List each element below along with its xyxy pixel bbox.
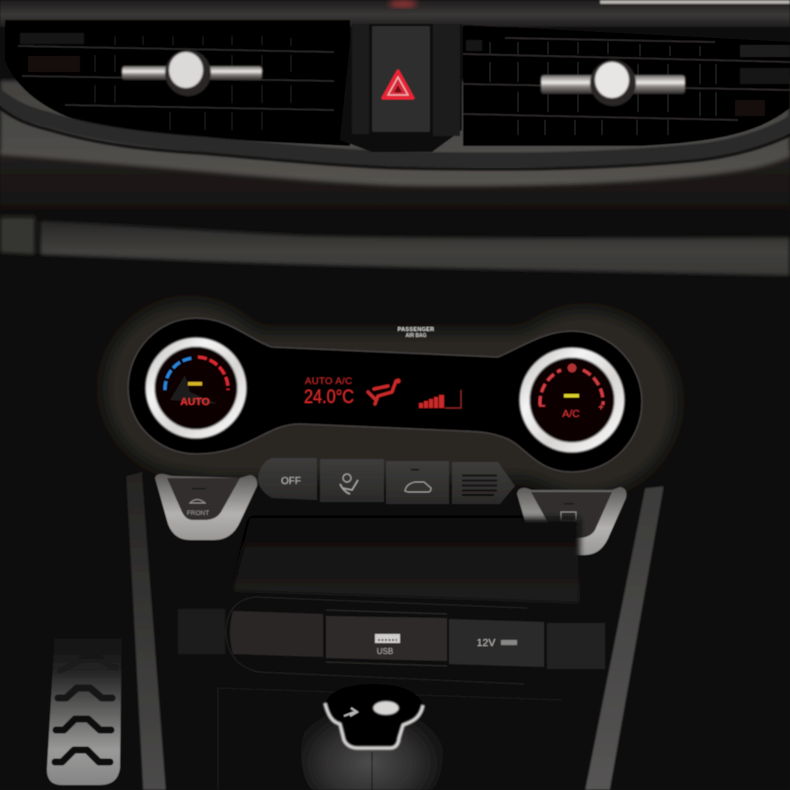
passenger air bag indicator: AIR BAG [405, 333, 427, 339]
button: recirculation airflow [320, 459, 384, 502]
console display bezel [128, 318, 642, 472]
12V socket panel: 12V [477, 637, 495, 649]
red climate display: AUTO A/C [305, 376, 352, 387]
icon: fan level bars [419, 390, 461, 408]
under-bezel dark surface [0, 150, 790, 225]
lower tray [218, 688, 562, 790]
blank side panel right [547, 623, 605, 669]
icon: red hazard triangle [383, 71, 413, 98]
vent bezel curve [0, 95, 790, 160]
storage tray [232, 518, 580, 604]
gear knob [301, 683, 443, 790]
12V socket panel [449, 619, 544, 667]
passenger air bag indicator [398, 327, 434, 339]
left vent chrome slider [122, 50, 262, 96]
footrest pedal [47, 612, 122, 785]
right climate dial: + [598, 402, 604, 412]
icon: airflow seat [368, 381, 396, 404]
grey lower dash band [0, 80, 790, 186]
front defrost button: FRONT [187, 510, 209, 517]
textured dash pad [0, 217, 790, 276]
right air vent [463, 25, 790, 146]
button: grille [452, 462, 515, 504]
climate button row [258, 458, 515, 504]
right climate dial [524, 352, 620, 448]
left climate dial: AUTO [180, 396, 210, 408]
right vent chrome slider [541, 60, 685, 106]
blank switch [230, 611, 323, 657]
red climate display [304, 376, 461, 408]
red climate display: 24.0°C [304, 387, 354, 408]
front defrost button [155, 474, 257, 540]
switch row [178, 609, 605, 669]
USB port panel [326, 610, 447, 666]
rear defrost button [517, 487, 626, 555]
rear defrost button: REAR [560, 526, 578, 533]
passenger air bag indicator: PASSENGER [398, 327, 434, 333]
button: air recirculation car [386, 461, 449, 504]
console outer halo [102, 300, 679, 496]
left centre rail [126, 472, 166, 790]
temperature arc [165, 358, 193, 390]
switch panel frame [226, 597, 527, 684]
button: OFF: OFF [281, 476, 301, 487]
button: OFF [258, 458, 317, 500]
USB port panel: USB [377, 647, 393, 656]
left air vent [5, 20, 350, 146]
right climate dial: A/C [562, 408, 580, 420]
left climate dial [150, 342, 242, 434]
blank side panel left [178, 609, 225, 654]
upper dash band [0, 0, 790, 27]
hazard button housing [340, 24, 462, 152]
right centre rail [585, 486, 664, 790]
